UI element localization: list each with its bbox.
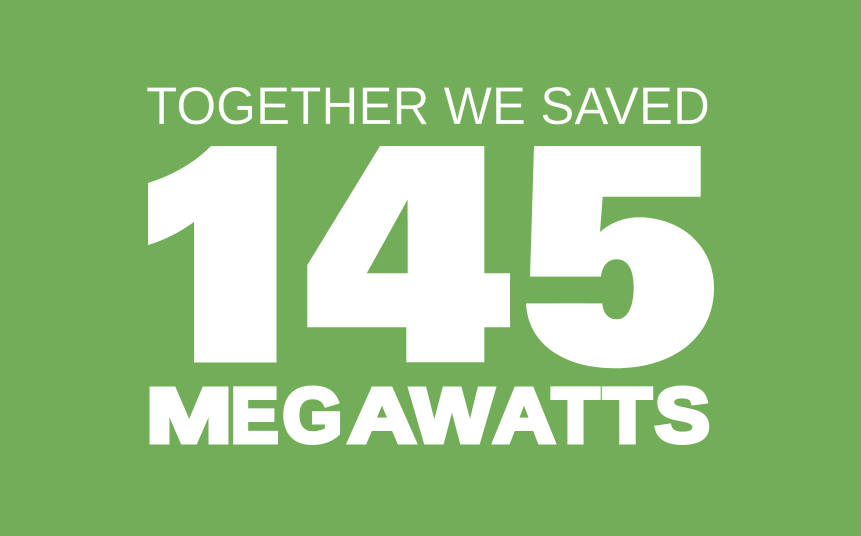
heading: together we saved: TOGETHER WE SAVED [146,77,710,136]
unit label: megawatts: S [655,373,710,459]
unit label: megawatts: M [146,373,232,459]
infographic canvas [147,87,714,445]
unit label: megawatts: T [552,373,599,459]
unit label: megawatts: G [283,373,342,459]
digit 4: 4 [317,105,500,407]
unit label: megawatts: A [348,373,416,459]
unit label: megawatts: E [231,373,278,459]
unit label: megawatts: A [493,373,555,459]
digit 5: 5 [533,106,709,408]
big number: 145 [148,146,714,368]
unit label: megawatts: W [411,373,493,459]
digit 1: 1 [130,105,324,407]
unit label: megawatts: T [604,373,652,459]
